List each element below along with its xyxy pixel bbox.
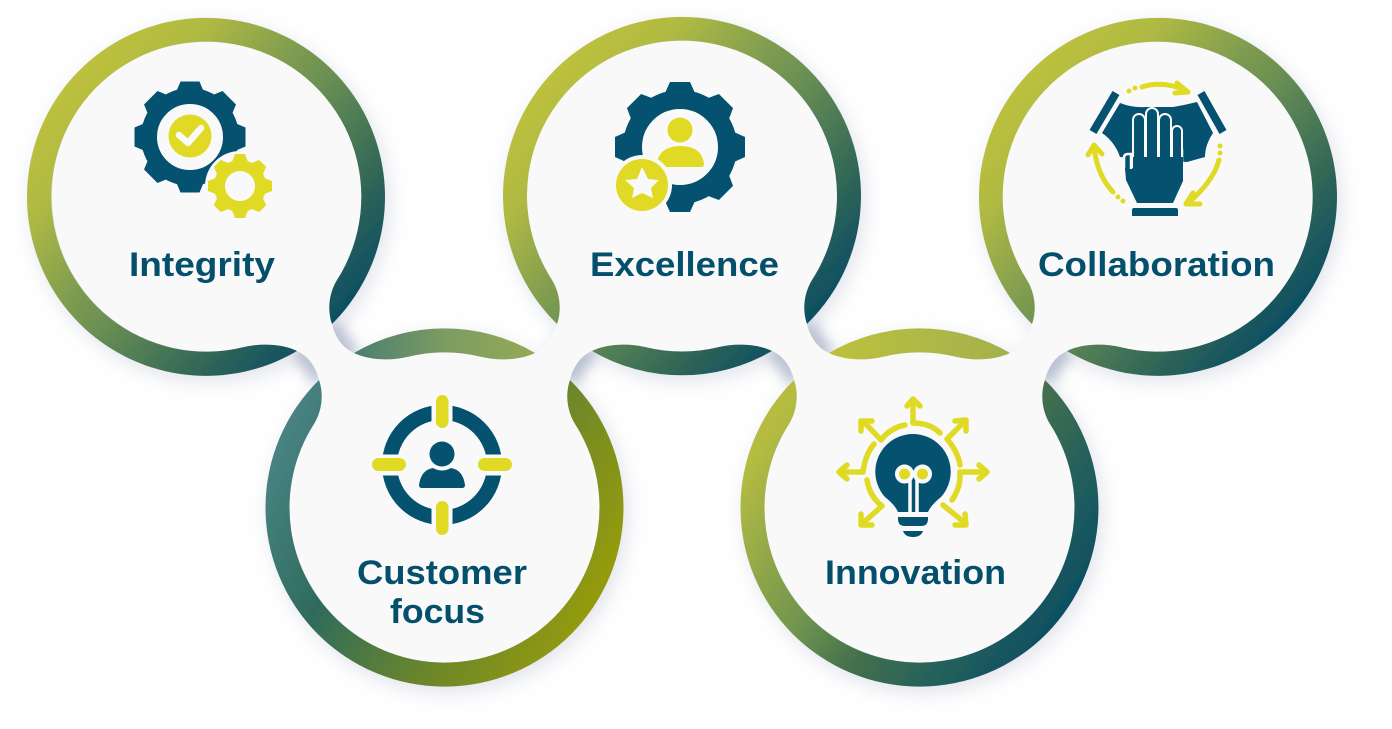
cloth (1102, 102, 1213, 162)
ring: excellence, bottom arc (592, 345, 772, 375)
lobe shading (297, 324, 1067, 380)
ring: integrity (27, 18, 385, 376)
ring: customer focus, top arc (354, 328, 535, 359)
ring: customer focus, main arc (265, 380, 624, 687)
icon: target with person (372, 395, 512, 535)
heading: Innovation: Innovation (825, 554, 1006, 592)
gear (615, 82, 745, 212)
crosshair marks (436, 395, 448, 428)
heading: Customer focus: Customer (357, 554, 527, 592)
person (430, 442, 454, 466)
heading: Excellence: Excellence (590, 246, 779, 284)
heading: Integrity: Integrity (129, 246, 275, 284)
bulb (875, 434, 951, 512)
target ring (390, 412, 494, 518)
cuff (1132, 208, 1178, 216)
cycle arrows (1088, 83, 1219, 204)
side bars (1093, 93, 1223, 132)
big gear (134, 82, 246, 192)
star badge (612, 155, 672, 215)
hand (1124, 150, 1182, 203)
icon: lightbulb with arrows (839, 399, 987, 537)
icon: hand on handshake with cycle arrows (1088, 83, 1223, 216)
ring: excellence, main arc (503, 17, 861, 324)
icon: gear with person and star (612, 82, 745, 215)
heading: Customer focus: focus (390, 593, 485, 631)
check badge (168, 114, 212, 158)
icon: gears with check (134, 82, 275, 221)
ring: innovation, top arc (829, 328, 1010, 359)
person (668, 118, 692, 142)
heading: Customer focus (357, 554, 527, 631)
inner panel shape (52, 41, 1313, 663)
small gear (205, 151, 275, 221)
arrows (839, 399, 987, 525)
ring: innovation, main arc (740, 380, 1098, 687)
ring: collaboration (979, 18, 1337, 376)
heading: Collaboration: Collaboration (1038, 246, 1275, 284)
